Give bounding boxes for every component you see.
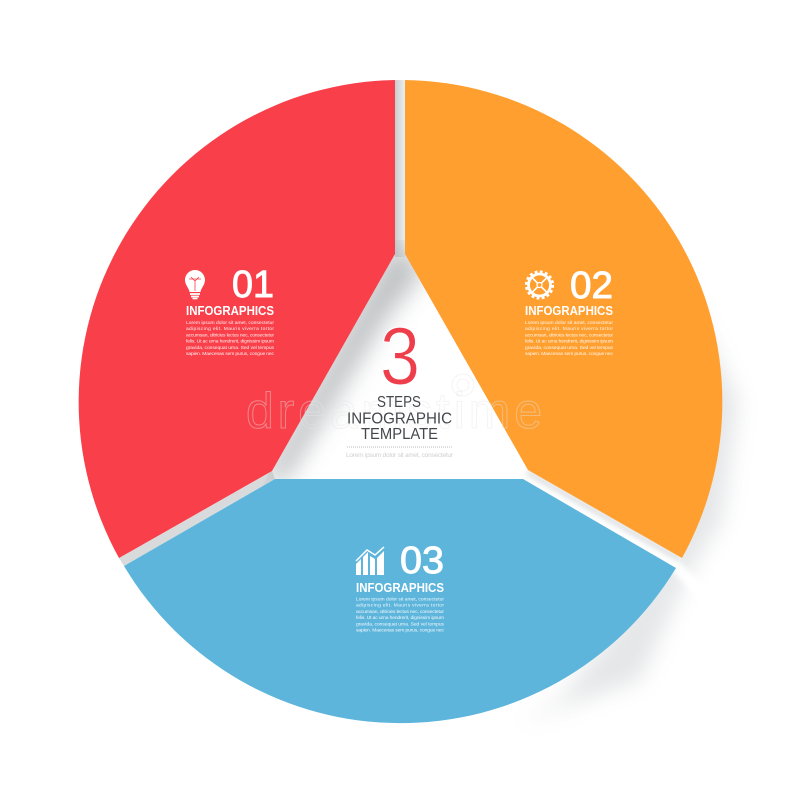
left gap	[119, 471, 275, 566]
title line: infographic: INFOGRAPHIC	[347, 410, 452, 428]
number 01: 01	[232, 264, 274, 306]
body text 02: sapien. Maecenas sem purus, congue nec	[525, 351, 614, 357]
body text 02	[525, 320, 614, 357]
body text 02: Lorem ipsum dolor sit amet, consectetur	[525, 320, 613, 326]
number 03: 03	[400, 540, 444, 582]
body text 03: felis. Ut ac urna hendrerit, dignissim ipsum	[356, 615, 444, 621]
heading 02: INFOGRAPHICS	[525, 304, 613, 318]
segment: blue	[124, 479, 676, 723]
body text 03: Lorem ipsum dolor sit amet, consectetur	[356, 596, 444, 602]
title line: template: TEMPLATE	[361, 426, 438, 443]
block 02 text	[525, 265, 614, 357]
inner disc with fold shadows	[119, 75, 682, 568]
big numeral 3: 3	[380, 311, 420, 402]
block 01 text	[186, 264, 275, 357]
body text 03: accumsan, ultricies lectus nec, consectetur	[356, 609, 444, 615]
vertical gap	[395, 75, 405, 257]
body text 01	[186, 320, 275, 357]
shadow from red segment on the centre	[262, 240, 425, 482]
centre title block	[346, 311, 454, 459]
outer soft shadow	[520, 240, 738, 722]
body text 03: sapien. Maecenas sem purus, congue nec	[356, 628, 445, 634]
title line: steps: STEPS	[377, 394, 421, 411]
body text 02: felis. Ut ac urna hendrerit, dignissim ipsum	[525, 339, 613, 345]
body text 03: gravida, consequat urna. Sed vel tempus	[356, 621, 445, 627]
right gap	[658, 550, 682, 567]
dotted rule	[347, 446, 453, 448]
subtitle: Lorem ipsum dolor sit amet, consectetur	[346, 452, 454, 459]
body text 03: adipiscing elit. Mauris viverra tortor	[356, 603, 444, 609]
body text 02: gravida, consequat urna. Sed vel tempus	[525, 345, 614, 351]
watermark: dreamstime	[246, 383, 542, 439]
body text 02: adipiscing elit. Mauris viverra tortor	[525, 326, 613, 332]
central white triangle	[260, 240, 540, 490]
icon: gear	[526, 272, 552, 298]
body text 01: Lorem ipsum dolor sit amet, consectetur	[186, 320, 274, 326]
icon: light bulb	[185, 270, 205, 298]
number 02: 02	[570, 265, 613, 307]
heading 01: INFOGRAPHICS	[186, 304, 274, 318]
heading 03: INFOGRAPHICS	[356, 581, 444, 595]
tail of the right gap shadow	[672, 560, 716, 604]
segment: red	[79, 80, 395, 558]
body text 03	[356, 596, 445, 634]
icon: bar chart with trend line	[356, 547, 384, 575]
body text 02: accumsan, ultricies lectus nec, consectetur	[525, 332, 613, 338]
body text 01: felis. Ut ac urna hendrerit, dignissim ipsum	[186, 339, 274, 345]
body text 01: adipiscing elit. Mauris viverra tortor	[186, 326, 274, 332]
body text 01: sapien. Maecenas sem purus, congue nec	[186, 351, 275, 357]
block 03 text	[356, 540, 445, 634]
body text 01: gravida, consequat urna. Sed vel tempus	[186, 345, 275, 351]
shadow in right gap	[526, 470, 682, 562]
body text 01: accumsan, ultricies lectus nec, consectetur	[186, 332, 274, 338]
segment: orange	[405, 80, 722, 558]
